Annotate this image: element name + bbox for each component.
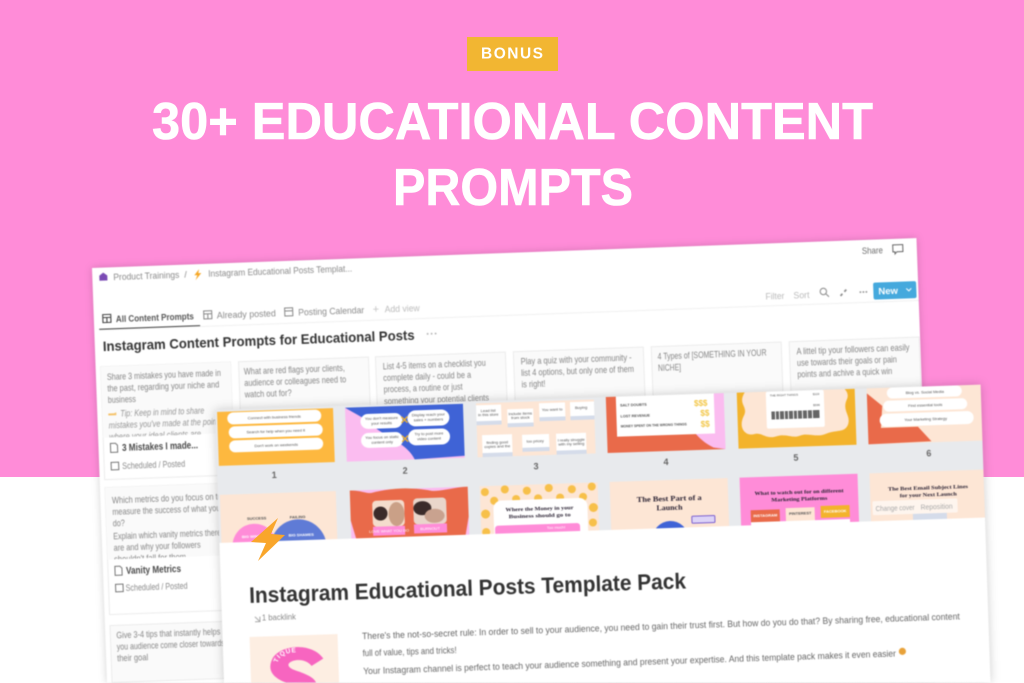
slide 2 [345,404,465,462]
card: checklist: List 4-5 items on a checklist you [383,358,486,373]
slide 2: You don't measure [365,415,399,421]
slide 6: Your Marketing Strategy [904,416,947,422]
slide 12: The Best Email Subject Lines [888,484,969,493]
card: little tip: use towards their goals or pain [797,354,897,369]
slide 4: $$ [701,420,710,429]
slide 2: video content [417,435,442,441]
card: red flags: audience or colleagues need to [244,374,346,389]
slide 5 [737,389,857,449]
card: 3 mistakes: where your ideal clients are [109,429,201,443]
card: vanity metrics: are and why your followers [113,540,201,554]
slide 1 [217,408,335,466]
slide 4: LOST REVENUE [620,414,650,419]
title [152,93,873,217]
card: vanity metrics: Explain which vanity metrics there [113,527,221,542]
slide 2: content only [371,439,393,445]
toolbar: Sort [793,290,810,301]
slide 3: You want to [542,406,563,412]
card: red flags [238,357,373,475]
card: tips for goal: you audience come closer towards [117,638,225,653]
slide 11 [739,473,860,526]
slide 7: FAILING [290,514,306,520]
slide 2: Try to post more [414,430,444,436]
slide 1: Connect with business friends [248,414,301,420]
slide 12: Reposition [920,502,953,512]
toolbar [765,287,867,302]
slide 2: your results [371,420,392,426]
card: checklist [375,352,509,470]
intro paragraph: Your Instagram channel is perfect to teach your audience something and present your expertise. And this template pack makes it even easier [363,649,896,676]
card: 4 types [651,342,785,460]
slide 9: Too much! [547,524,565,530]
card: quiz: list 4 options, but only one of them [521,364,634,379]
card: tips for goal [110,621,242,683]
slide 3: in this store [478,412,499,417]
slide 6: Blog vs. Social Media [906,389,945,395]
panel: template pack page screenshot [210,380,995,683]
slide 4: SALT DOUBTS [620,403,647,408]
slide 1: Search for help when you need it [246,428,306,434]
cover thumbnail: boutique logo: TIQUE [272,647,296,662]
card: vanity metrics: Vanity Metrics [126,564,182,577]
cover thumbnail: boutique logo [249,634,340,683]
slide 3: Lead list [481,408,497,413]
database heading: Instagram Content Prompts for Educational Posts [103,327,415,354]
view tabs: All Content Prompts [116,311,194,324]
slide 11: FACEBOOK [824,508,847,514]
card: little tip: points and achive a quick win [797,366,892,380]
page heading: Instagram Educational Posts Template Pack [249,568,687,608]
slide 11: Marketing Platforms [771,496,827,504]
slide 5: THE RIGHT THINGS [770,393,798,398]
card: vanity metrics: do? [113,518,125,529]
slide 3 [476,399,596,457]
slide 3: from stock [511,415,530,420]
card: 3 mistakes: Share 3 mistakes you have made in [107,368,221,383]
slide 7: SUCCESS [247,515,267,521]
slide 4: MONEY SPENT ON THE WRONG THINGS [621,422,687,429]
view tabs: Add view [385,303,420,314]
slide number 4: 4 [663,457,669,467]
card: quiz: Play a quiz with your community - [520,352,632,367]
slide 4 [606,393,726,453]
slide 3: too pricey [526,438,544,444]
slide 9: Business should go to [509,512,571,520]
slide 11: PINTEREST [789,510,812,516]
title: 30+ EDUCATIONAL CONTENT [152,93,873,151]
badge: bonus: BONUS [481,46,543,62]
card: vanity metrics: Scheduled / Posted [125,581,188,593]
slide 11: What to watch out for on different [754,488,844,497]
breadcrumb: Instagram Educational Posts Templat... [208,264,352,279]
intro paragraph: There's the not-so-secret rule: In order to sell to your audience, you need to gain their trust first. But how do you do that? By sharing free, educational content [362,611,960,641]
toolbar: Filter [765,291,785,302]
slide 8: BURNOUT [420,526,441,531]
slide 9 [480,482,600,535]
slide 7: BIG SHAMES [288,532,314,538]
slide 7: BIG WINS [242,534,261,539]
card: vanity metrics: measure the success of what you [112,503,221,518]
intro paragraph: full of value, tips and tricks! [362,645,457,658]
card: vanity metrics: Which metrics do you focus on to [112,491,222,506]
slide 8 [349,486,470,540]
card: 3 mistakes: business [108,394,136,406]
card: checklist: complete daily - could be a [383,370,472,384]
breadcrumb: / [184,270,187,280]
pink background band [0,0,1024,477]
breadcrumb [99,264,352,284]
slide 6: Find essential tools [908,402,942,408]
button: new: New [878,286,899,297]
view tabs: + [372,304,379,316]
card: 3 mistakes: Scheduled / Posted [122,459,185,471]
card: 3 mistakes: mistakes you've made at the point [109,416,219,431]
slide 12: for your Next Launch [900,491,958,499]
card: checklist: process, a routine or just [383,382,463,395]
card: 3 mistakes [101,362,235,480]
share and comment controls [862,245,903,256]
card: 4 types: NICHE] [658,362,681,374]
share and comment controls: Share [862,245,883,256]
slide 11: INSTAGRAM [753,512,778,518]
card: little tip: A littel tip your followers can easily [796,342,910,357]
icon: lightning bolt [251,518,285,561]
view tabs [99,284,919,331]
slide 12 [870,470,985,522]
card: red flags: watch out for? [244,388,292,401]
card: quiz [513,347,647,465]
slide 7 [220,491,338,543]
slide 9: Where the Money in your [505,505,574,513]
view tabs: Posting Calendar [298,305,364,318]
slide 12: Change cover [875,503,915,513]
card: quiz: is right! [521,379,546,390]
card: 3 mistakes: 3 Mistakes I made... [122,440,198,454]
slide 3: Buying [575,405,587,410]
slide 3: I really struggle [558,437,586,443]
slide number 1: 1 [272,470,277,480]
badge: bonus [467,37,558,71]
card: 3 mistakes: Tip: Keep in mind to share [120,406,204,420]
slide 2: You focus on static [365,434,399,440]
slide 10: The Best Part of a [637,494,702,504]
slide 1: Don't work on weekends [254,442,298,448]
view tabs: Already posted [217,308,276,320]
slide 10: Launch [656,504,683,512]
slide 10 [610,478,730,530]
title: PROMPTS [393,159,633,217]
slide 3: with my selling [558,441,584,447]
card: tips for goal: Give 3-4 tips that instantly helps [116,627,221,641]
card: checklist: something your potential clients [384,393,489,407]
slide 6 [867,385,982,444]
card: vanity metrics [105,488,221,615]
slide 4: $$ [700,409,710,418]
slide number 3: 3 [533,461,539,471]
slide number 6: 6 [926,448,932,458]
slide 3: Include items [508,410,532,416]
slide 3: finding good [486,439,508,445]
card: red flags: What are red flags your clients, [244,363,345,378]
slide 4: $$$ [694,399,708,408]
slide 2: sales + numbers [414,416,443,422]
slide number 5: 5 [793,453,799,463]
backlink: 1 backlink [262,612,297,623]
card: tips for goal: their goal [117,652,148,664]
slide 2: Display reach your [412,411,446,417]
card: 4 types: 4 Types of [SOMETHING IN YOUR [657,348,767,363]
panel: content prompts database screenshot [92,238,933,683]
breadcrumb: Product Trainings [113,270,180,282]
card: vanity metrics: shouldn't fall for them [114,552,186,565]
card: little tip [789,337,923,455]
slide number 2: 2 [402,466,408,476]
intro paragraph [362,611,962,676]
slide 8: LOVE WHAT YOU DO [369,528,409,534]
slide 3: copies and the [484,443,511,449]
card: 3 mistakes: the past, regarding your niche and [107,379,220,395]
slide 5: $599 [813,403,820,407]
button: new [873,281,917,300]
slide 5: $119 [813,392,820,396]
cover gallery [216,384,985,543]
